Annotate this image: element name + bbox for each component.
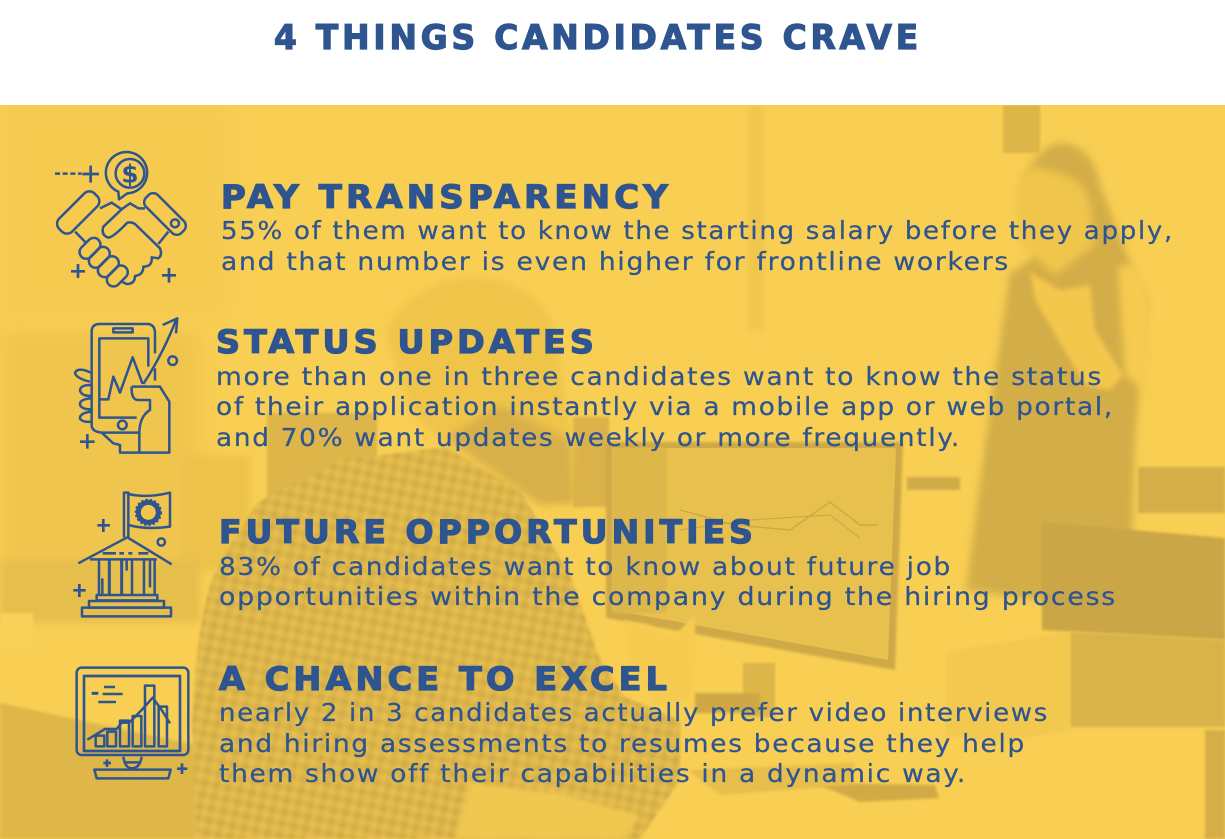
text: status updates details: more than one in three candidates want to know the status — [216, 362, 1103, 391]
heading: pay transparency: PAY TRANSPARENCY — [221, 178, 672, 216]
text: pay transparency details: 55% of them want to know the starting salary before they apply, — [221, 216, 1174, 245]
icon: handshake with coin — [54, 152, 189, 289]
computer monitor — [606, 442, 903, 717]
icon: monitor with bar chart — [77, 668, 188, 778]
wooden furniture and desk — [688, 522, 1225, 839]
text: status updates details: and 70% want updates weekly or more frequently. — [216, 423, 961, 452]
heading: status updates: STATUS UPDATES — [216, 323, 598, 361]
text: pay transparency details: and that number is even higher for frontline workers — [221, 247, 1010, 276]
text: pay transparency details — [221, 216, 1174, 276]
section: a chance to excel — [77, 660, 1049, 788]
section: status updates — [75, 318, 1114, 453]
icon: handshake with coin: $ — [121, 160, 139, 189]
man at desk — [192, 277, 695, 839]
icon: phone with rising chart — [75, 318, 177, 453]
text: future opportunities details: opportunities within the company during the hiring process — [219, 582, 1117, 611]
section: pay transparency — [54, 152, 1174, 289]
heading: a chance to excel: A CHANCE TO EXCEL — [219, 660, 671, 698]
text: a chance to excel details: nearly 2 in 3 candidates actually prefer video interviews — [219, 698, 1049, 727]
heading: future opportunities: FUTURE OPPORTUNITIES — [219, 513, 757, 551]
icon: bank with gear flag — [73, 493, 172, 616]
text: status updates details: of their application instantly via a mobile app or web portal, — [216, 392, 1114, 421]
section: future opportunities — [73, 493, 1117, 616]
text: a chance to excel details: them show off their capabilities in a dynamic way. — [219, 759, 967, 788]
text: future opportunities details — [219, 552, 1117, 611]
text: future opportunities details: 83% of candidates want to know about future job — [219, 552, 952, 581]
text: a chance to excel details — [219, 698, 1049, 788]
text: a chance to excel details: and hiring assessments to resumes because they help — [219, 729, 1026, 758]
woman — [966, 143, 1150, 600]
text: status updates details — [216, 362, 1114, 452]
title: 4 THINGS CANDIDATES CRAVE — [274, 18, 922, 58]
